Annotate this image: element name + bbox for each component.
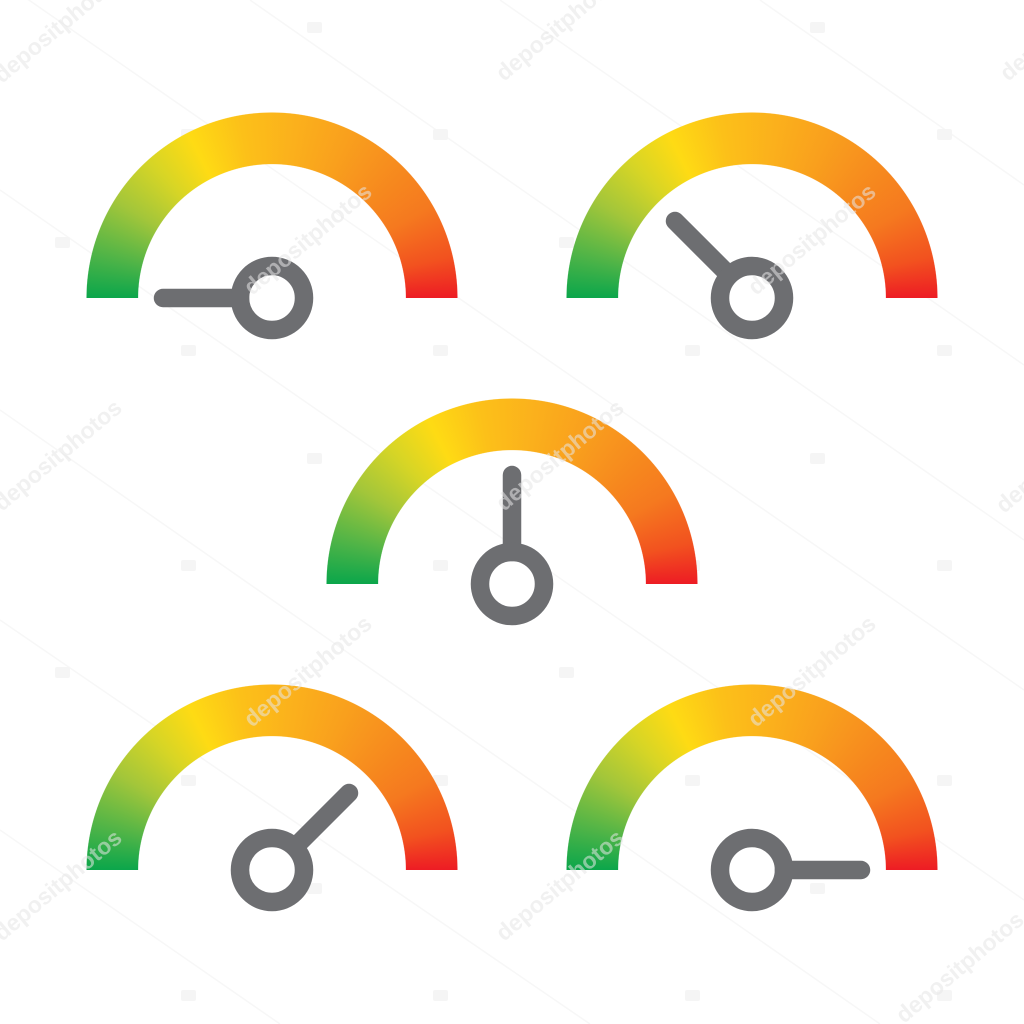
gradient arc (566, 684, 938, 870)
gradient arc (86, 112, 458, 298)
watermark text overlay: depositphotos (743, 178, 881, 300)
gauge: needle pointing straight up (326, 398, 698, 626)
gauge: needle pointing far left (86, 112, 458, 340)
needle and hub (230, 784, 358, 912)
watermark text overlay: depositphotos (239, 610, 377, 732)
watermark text overlay: depositphotos (743, 610, 881, 732)
watermark text overlay: depositphotos (491, 824, 629, 946)
needle and hub (666, 212, 794, 340)
needle and hub (154, 256, 314, 340)
watermark text overlay: depositphotos (491, 394, 629, 516)
gauge: needle pointing upper right (86, 684, 458, 912)
gauge: needle pointing upper left (566, 112, 938, 340)
needle and hub (470, 466, 554, 626)
gradient arc (86, 684, 458, 870)
gradient arc (326, 398, 698, 584)
gauge: needle pointing far right (566, 684, 938, 912)
watermark text overlay: depositphotos (239, 178, 377, 300)
needle and hub (710, 828, 870, 912)
gradient arc (566, 112, 938, 298)
